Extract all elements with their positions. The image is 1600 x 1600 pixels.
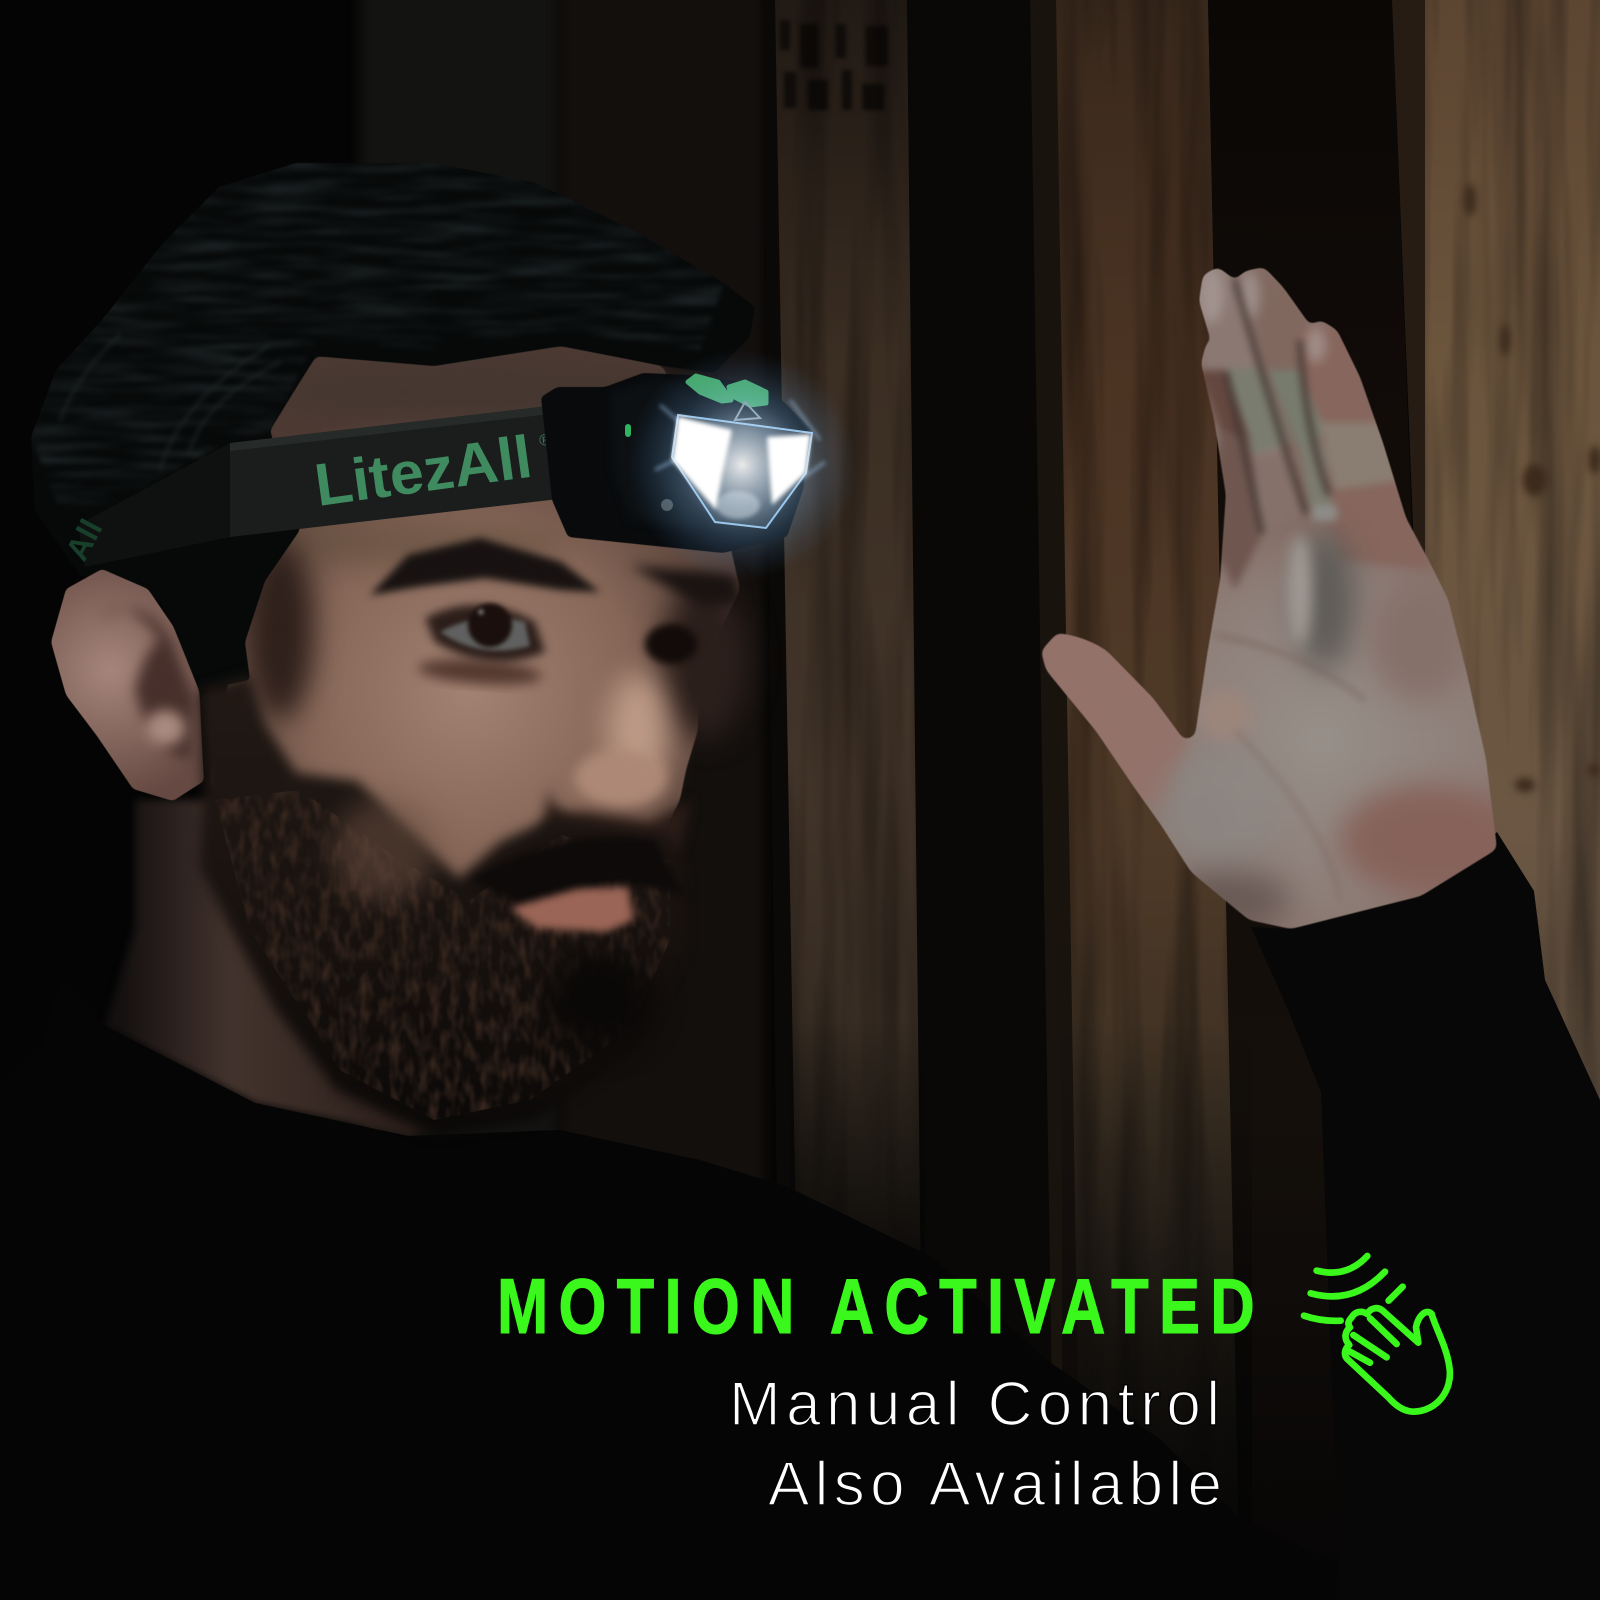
burnt stamp marks on stud — [780, 20, 888, 110]
fingers grey bands — [1229, 368, 1287, 452]
raised arm sleeve — [1251, 832, 1600, 1600]
subheading line 1: Manual Control — [729, 1370, 1220, 1439]
lens reflector — [715, 430, 775, 514]
headlamp body — [541, 350, 857, 580]
wood knots — [1464, 184, 1600, 792]
headband strap with logo: All — [58, 513, 109, 566]
lens — [672, 415, 812, 528]
man: eyebrow — [370, 538, 600, 595]
glow — [627, 350, 857, 580]
light flares — [655, 400, 825, 480]
wood grain — [775, 0, 1600, 1520]
LED panels — [672, 416, 732, 510]
man: hair — [31, 163, 755, 691]
finger gaps — [1226, 280, 1329, 533]
hand — [1030, 260, 1520, 930]
headband strap with logo — [58, 405, 576, 567]
green indicator — [625, 424, 631, 437]
man: ear — [51, 569, 204, 801]
heading: motion activated: MOTION ACTIVATED — [497, 1262, 1265, 1350]
subheading line 2: Also Available — [768, 1450, 1222, 1519]
fingertips pale — [1200, 267, 1224, 323]
bottom text block — [497, 1262, 1265, 1519]
palm creases and tones — [1295, 530, 1355, 670]
logo text on strap: LitezAll — [311, 423, 536, 519]
beard texture — [215, 790, 670, 1120]
icon: waving hand with motion waves — [1304, 1256, 1450, 1412]
man: lips — [510, 887, 633, 932]
logo mark — [735, 402, 760, 420]
green buttons — [688, 376, 731, 401]
fingers — [1200, 268, 1276, 452]
ring — [1312, 505, 1337, 521]
man: near eye — [425, 603, 545, 661]
hair strands highlight — [31, 163, 724, 510]
man: face skin — [210, 346, 740, 1090]
man: far eye and brow — [630, 565, 742, 664]
thumb shading — [1042, 634, 1188, 798]
man: beard — [199, 675, 685, 1136]
face shading — [246, 358, 749, 850]
headband strap with logo: ® — [538, 431, 552, 450]
man: neck and shirt — [0, 800, 1420, 1600]
sensor — [661, 499, 673, 511]
